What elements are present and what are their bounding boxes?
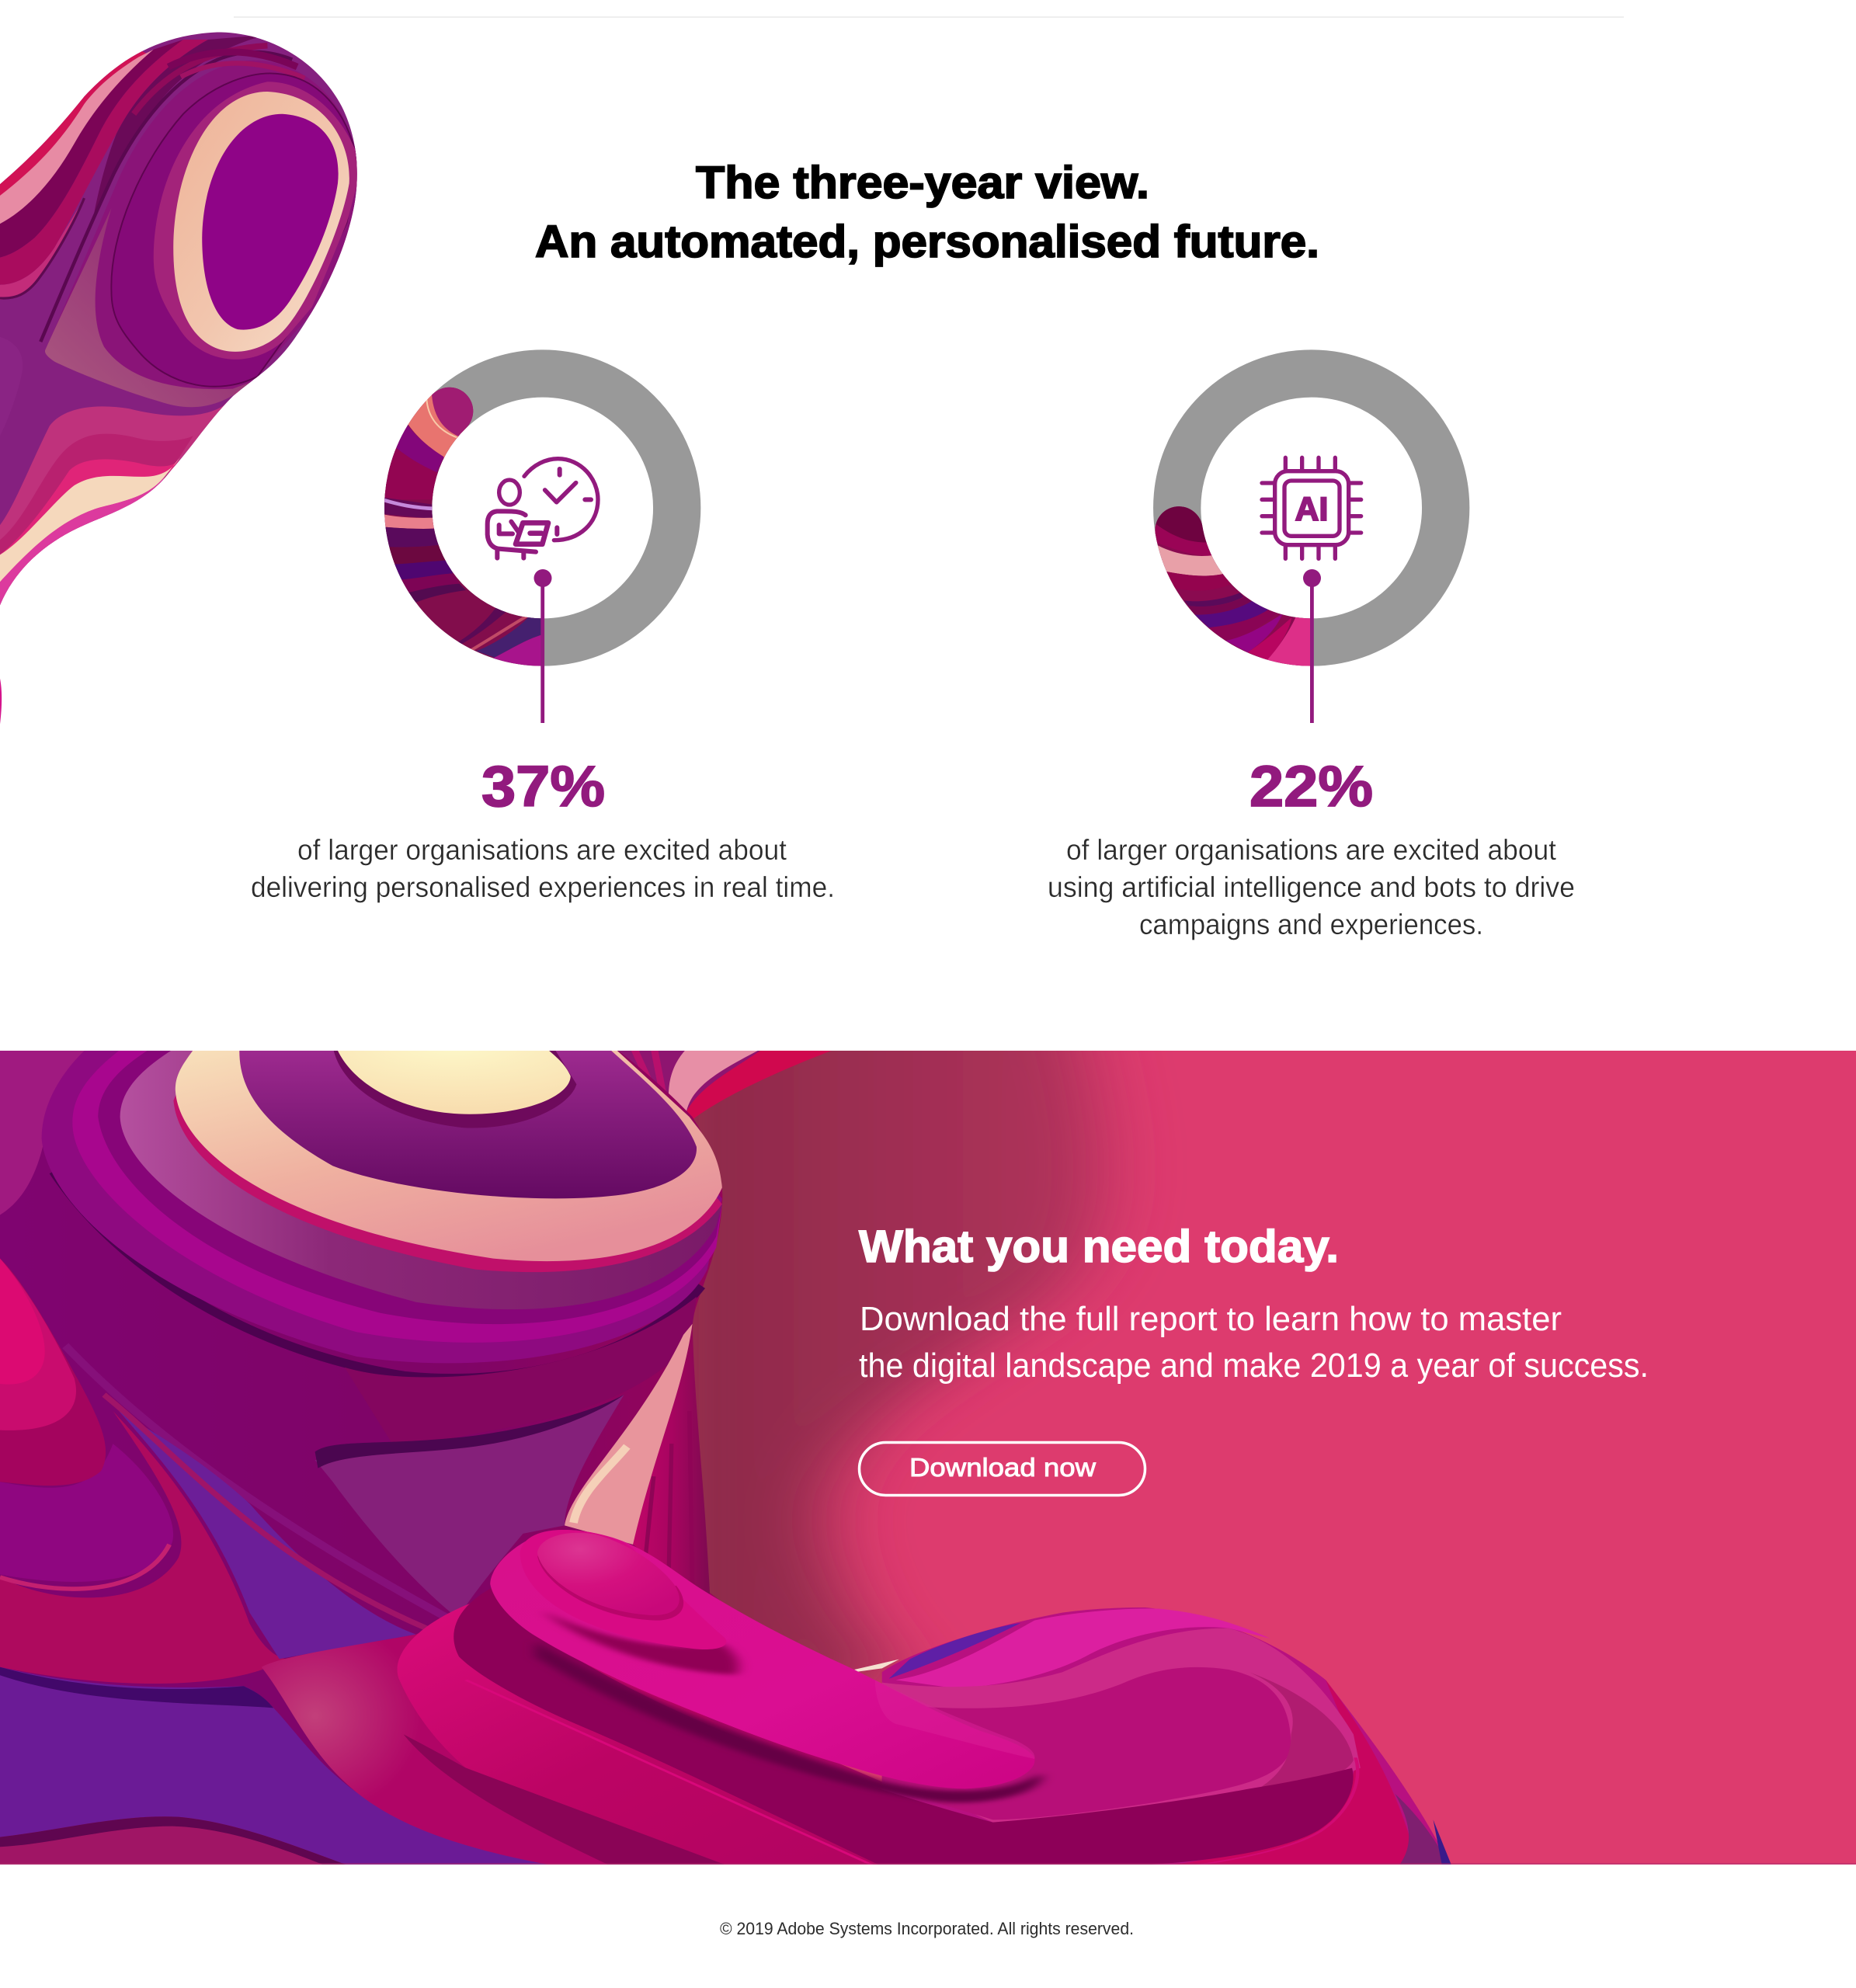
- stat description 22%: [1048, 834, 1575, 940]
- connector line: [1310, 579, 1314, 723]
- finger shadow: [535, 1641, 1042, 1802]
- button lip: [537, 1555, 683, 1621]
- right lobe indigo edge: [1434, 1819, 1452, 1866]
- stat value 37%: 37%: [481, 754, 605, 818]
- band soft shadow: [693, 1051, 1134, 1684]
- donut ring grey: [1177, 374, 1446, 642]
- right lobe hot magenta: [896, 1608, 1270, 1687]
- donut chart: 37%: [378, 374, 677, 670]
- icon: AI chip: AI: [1295, 491, 1328, 528]
- right lobe silhouette: [882, 1607, 1451, 1866]
- right lobe rim: [1176, 1680, 1409, 1865]
- artwork lower left purple: [0, 1667, 571, 1868]
- title line 1: The three-year view.: [696, 158, 1149, 208]
- artwork main mass: [0, 1051, 722, 1819]
- blob purple centre: [202, 114, 339, 330]
- finger: [490, 1530, 1034, 1788]
- button: download now: [859, 1443, 1145, 1496]
- blob small sliver: [0, 679, 2, 724]
- connector line: [540, 579, 544, 723]
- button label: Download now: [909, 1453, 1096, 1482]
- ridge shadow: [542, 1610, 739, 1675]
- right lobe dim edge: [1229, 1672, 1354, 1804]
- description line 2: using artificial intelligence and bots to drive: [1048, 871, 1575, 903]
- donut chart: 22%: [1147, 374, 1446, 670]
- body line 2: the digital landscape and make 2019 a year of success.: [859, 1347, 1649, 1385]
- cream sliver: [854, 1660, 899, 1672]
- heading: What you need today.: [859, 1222, 1339, 1272]
- bright rim line: [1187, 1757, 1357, 1866]
- right lobe purple side: [1395, 1794, 1441, 1865]
- bright stripe: [466, 1680, 875, 1866]
- blob silhouette layers: [0, 33, 357, 606]
- donut ring grey: [408, 374, 677, 642]
- right lobe purple sliver: [889, 1623, 1020, 1679]
- artwork central crimson: [262, 1633, 882, 1865]
- lower magenta layer: [398, 1604, 726, 1833]
- connector dot: [1303, 569, 1321, 587]
- body line 1: Download the full report to learn how to master: [860, 1300, 1562, 1338]
- title: [535, 158, 1319, 267]
- footer copyright: © 2019 Adobe Systems Incorporated. All rights reserved.: [720, 1919, 1134, 1938]
- blob peach ring: [173, 92, 349, 352]
- connector: 37% stem: [534, 569, 551, 723]
- artwork lobes: [42, 1046, 722, 1378]
- description line 3: campaigns and experiences.: [1139, 909, 1483, 940]
- button dome: [537, 1533, 679, 1615]
- artwork left hill: [0, 1259, 428, 1684]
- artwork front mass: [398, 1530, 1452, 1866]
- description line 2: delivering personalised experiences in real time.: [251, 871, 835, 903]
- lower left dark strip: [404, 1734, 729, 1866]
- donut 37% textured arc: [384, 387, 540, 666]
- artwork creased panel: [65, 1297, 711, 1624]
- donut 22% textured arc: [1155, 506, 1310, 666]
- panel text: what you need today: [859, 1222, 1649, 1385]
- top divider line: [234, 16, 1624, 18]
- artwork top left shading: [0, 1051, 84, 1215]
- icon: AI chip: [1262, 457, 1361, 558]
- icon: person with laptop and clock: [488, 459, 598, 558]
- decorative 3D blob, top left: [0, 0, 377, 724]
- connector dot: [534, 569, 551, 587]
- finger tip highlight: [875, 1680, 1034, 1759]
- title line 2: An automated, personalised future.: [535, 217, 1319, 267]
- connector: 22% stem: [1303, 569, 1321, 723]
- band artwork: flowing 3D shapes: [0, 1046, 932, 1868]
- artwork swirl top right: [618, 1051, 831, 1118]
- band edge line: [0, 1863, 1856, 1865]
- stat description 37%: [251, 834, 835, 903]
- dark band under finger: [454, 1587, 1354, 1866]
- panel: call to action band: [0, 1051, 1856, 1865]
- stat value 22%: 22%: [1249, 754, 1373, 818]
- band background: [693, 1051, 1856, 1865]
- ridge: [520, 1530, 726, 1649]
- description line 1: of larger organisations are excited about: [297, 834, 787, 866]
- button outline: [859, 1443, 1145, 1496]
- description line 1: of larger organisations are excited about: [1066, 834, 1557, 866]
- right lobe centre: [882, 1667, 1291, 1819]
- right lobe mid layer: [882, 1628, 1361, 1825]
